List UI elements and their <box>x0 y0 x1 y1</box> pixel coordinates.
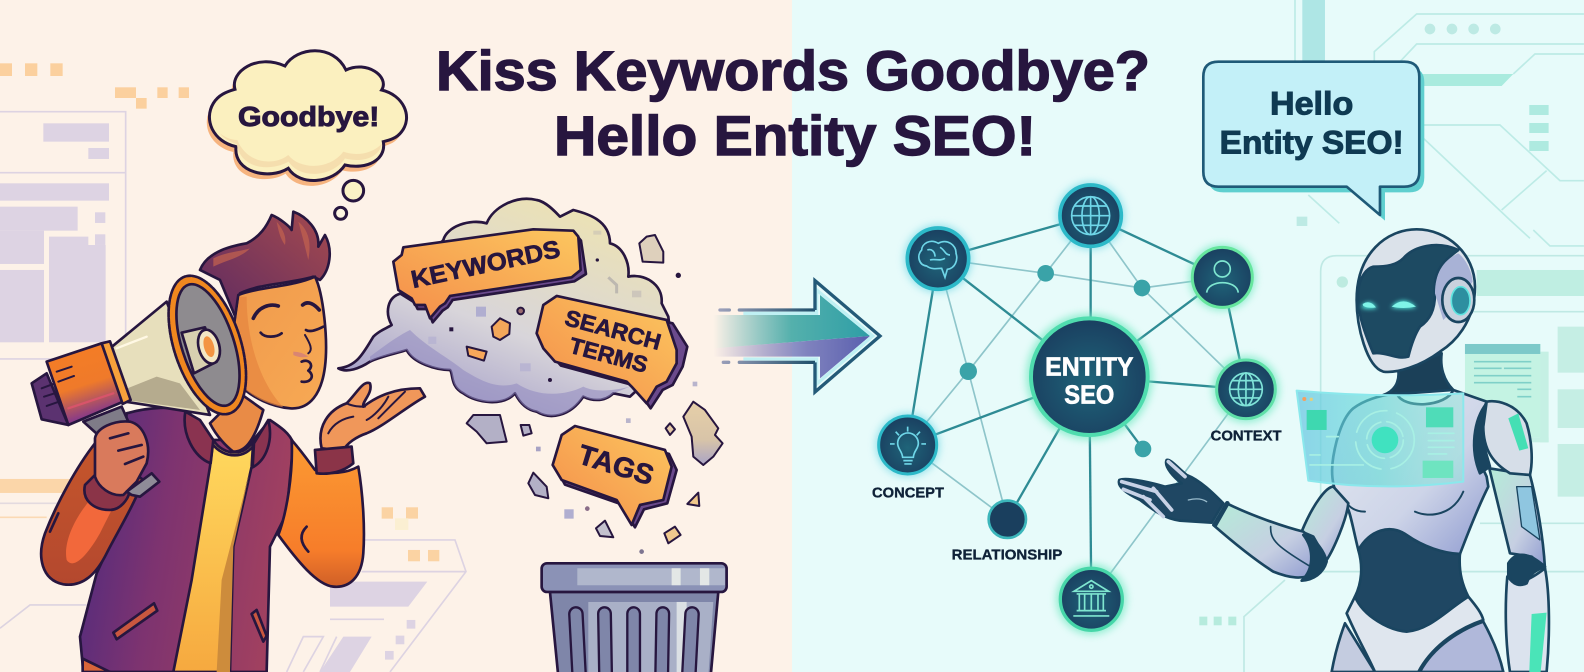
robot <box>1119 229 1549 672</box>
node: institution <box>1060 568 1122 630</box>
jacket hem <box>83 659 110 672</box>
node: concept bulb <box>879 416 937 474</box>
title <box>436 39 1150 167</box>
left background decoration <box>0 63 189 628</box>
man blowing a kiss with megaphone <box>32 212 425 672</box>
speech bubble: hello: Entity SEO! <box>1220 124 1404 160</box>
speech bubble: hello: Hello <box>1270 85 1353 121</box>
jacket collar <box>185 412 270 467</box>
tag: keywords: KEYWORDS <box>409 236 563 294</box>
panel: left warm background <box>0 0 792 672</box>
node: globe <box>1060 185 1121 246</box>
node glows <box>1026 244 1279 635</box>
megaphone <box>32 266 261 425</box>
trash can <box>542 563 727 672</box>
holding hand <box>84 421 159 510</box>
bin slots <box>569 607 699 672</box>
node: person <box>1192 247 1252 307</box>
megaphone handle <box>83 407 128 437</box>
speech bubble: hello <box>1203 62 1424 221</box>
t-shirt <box>173 440 255 672</box>
robot screen background <box>1199 256 1584 672</box>
left sleeve <box>41 443 143 585</box>
node: entity seo hub <box>1031 318 1148 435</box>
tag: search terms: TERMS <box>567 332 651 378</box>
right sleeve <box>278 440 364 587</box>
blue node glows <box>876 182 1125 477</box>
entity network <box>872 182 1282 635</box>
panel: right cool background <box>792 0 1584 672</box>
smoke cloud <box>338 199 673 416</box>
blowing hand <box>315 383 425 474</box>
face <box>233 277 326 408</box>
label: context: CONTEXT <box>1211 429 1282 445</box>
left arm <box>1213 487 1348 581</box>
bin body <box>550 592 718 672</box>
tag: tags <box>553 426 677 527</box>
smoke cloud with keyword tags <box>338 199 723 554</box>
tag: search terms <box>537 296 687 408</box>
neck <box>210 393 263 452</box>
left floor decoration <box>287 507 466 672</box>
hand <box>1119 460 1227 525</box>
right arm <box>1474 401 1549 672</box>
junction dots <box>960 265 1151 457</box>
node: entity seo hub: ENTITY <box>1045 352 1133 382</box>
pockets <box>113 603 267 642</box>
hips <box>1347 597 1483 672</box>
holographic screen <box>1297 391 1463 486</box>
head <box>1357 229 1475 372</box>
jacket <box>80 408 293 672</box>
transition arrow <box>713 281 880 392</box>
hair <box>200 212 330 320</box>
tag: search terms: SEARCH <box>562 304 664 355</box>
legs <box>1332 622 1503 672</box>
right background decoration <box>1295 0 1584 246</box>
waist <box>1355 529 1468 632</box>
label: concept: CONCEPT <box>872 485 944 501</box>
bin lid <box>542 563 727 592</box>
node: relationship <box>989 501 1026 538</box>
tag: keywords <box>393 229 586 322</box>
title: Hello Entity SEO! <box>554 104 1036 167</box>
torso <box>1332 390 1488 554</box>
node: brain <box>907 228 969 289</box>
thick connectors <box>908 216 1246 599</box>
label: relationship: RELATIONSHIP <box>952 548 1063 564</box>
thought bubble: Goodbye: Goodbye! <box>238 101 379 132</box>
node: entity seo hub: SEO <box>1064 379 1114 409</box>
tag: tags: TAGS <box>575 439 658 491</box>
thought bubble: Goodbye <box>207 51 407 219</box>
thin connectors <box>908 216 1246 599</box>
debris fragments <box>467 235 723 554</box>
title: Kiss Keywords Goodbye? <box>436 39 1150 102</box>
node: globe context <box>1217 360 1275 419</box>
neck <box>1383 353 1453 395</box>
